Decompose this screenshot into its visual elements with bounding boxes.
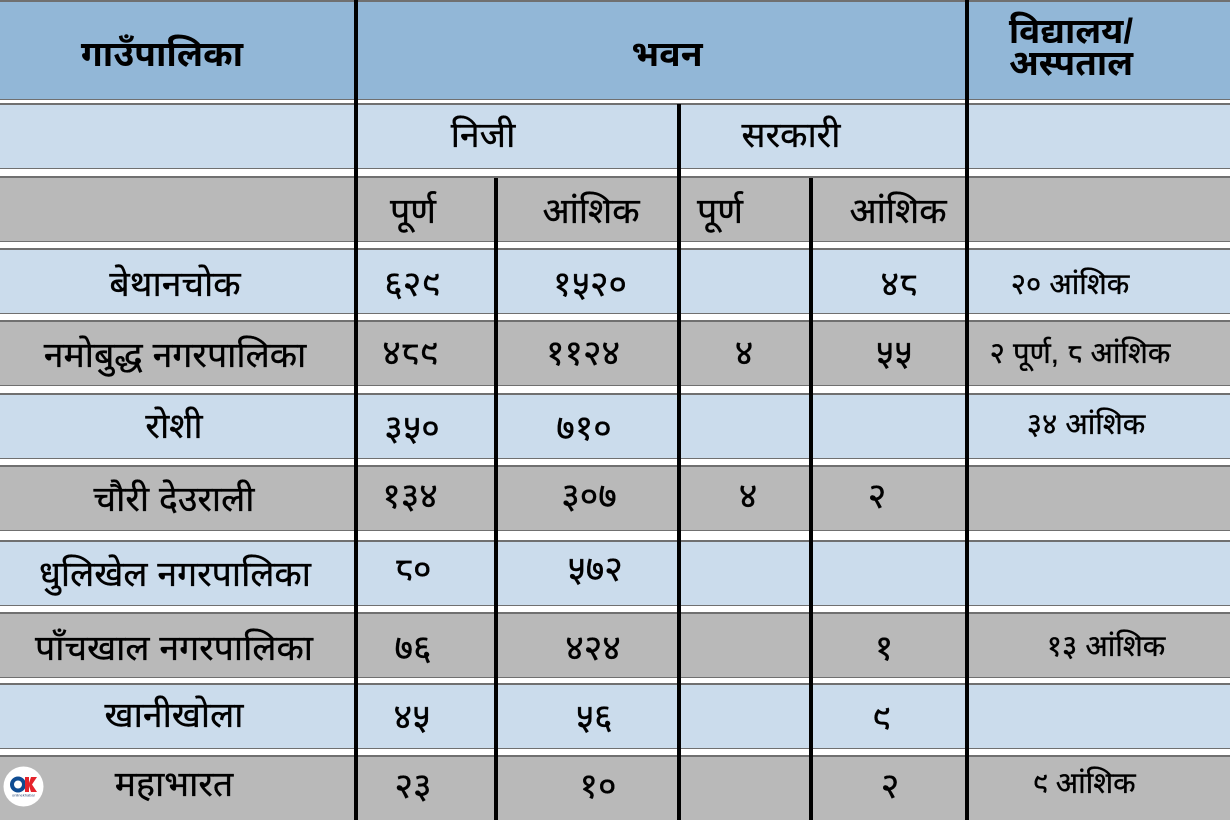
private partial: ५६ xyxy=(575,697,613,737)
school or hospital: १३ आंशिक xyxy=(1047,630,1165,663)
private partial: ३०७ xyxy=(561,476,617,516)
heading: school or hospital: विद्यालय/ xyxy=(1009,12,1133,51)
private partial: ५७२ xyxy=(567,549,623,589)
heading: government partial: आंशिक xyxy=(849,191,947,231)
name: महाभारत xyxy=(115,764,233,804)
heading: municipality: गाउँपालिका xyxy=(81,34,243,74)
private partial: ४२४ xyxy=(565,628,621,668)
heading: building: भवन xyxy=(631,34,703,74)
row: Chauri Deurali xyxy=(0,465,1230,531)
school or hospital: २० आंशिक xyxy=(1011,268,1129,301)
private full: ४८९ xyxy=(382,333,438,373)
private full: ३५० xyxy=(384,408,440,448)
government partial: २ xyxy=(868,476,886,516)
row: Mahabharat xyxy=(0,755,1230,820)
name: नमोबुद्ध नगरपालिका xyxy=(44,335,306,375)
icon: onlinekhabar logo xyxy=(4,766,44,806)
private full: ४५ xyxy=(393,697,431,737)
government full: ४ xyxy=(735,333,753,373)
private partial: ७१० xyxy=(556,408,612,448)
row: Namobuddha xyxy=(0,320,1230,386)
heading: school or hospital: अस्पताल xyxy=(1009,44,1133,83)
government partial: ५५ xyxy=(875,333,913,373)
private full: ७६ xyxy=(394,628,432,668)
government partial: २ xyxy=(881,766,899,806)
school or hospital: ९ आंशिक xyxy=(1032,767,1136,800)
heading: school or hospital xyxy=(1008,12,1134,83)
ownership sub-header row xyxy=(0,103,1230,169)
government full: ४ xyxy=(739,476,757,516)
row: Dhulikhel xyxy=(0,540,1230,606)
name: पाँचखाल नगरपालिका xyxy=(35,628,313,668)
heading: government full: पूर्ण xyxy=(697,191,743,231)
name: बेथानचोक xyxy=(109,264,241,304)
private full: २३ xyxy=(394,766,432,806)
government partial: १ xyxy=(875,628,893,668)
name: धुलिखेल नगरपालिका xyxy=(39,554,311,594)
private full: ६२९ xyxy=(384,264,440,304)
private partial: १५२० xyxy=(553,264,627,304)
heading: government: सरकारी xyxy=(742,115,840,155)
school or hospital: ३४ आंशिक xyxy=(1027,408,1145,441)
name: रोशी xyxy=(145,406,203,446)
row: Khanikhola xyxy=(0,683,1230,749)
row: Panchkhal xyxy=(0,612,1230,678)
icon: onlinekhabar logo: onlinekhabar xyxy=(12,792,36,798)
government partial: ९ xyxy=(872,698,890,738)
row: Bethanchok xyxy=(0,248,1230,314)
heading: private: निजी xyxy=(451,115,515,155)
government partial: ४८ xyxy=(880,264,918,304)
heading: private full: पूर्ण xyxy=(390,191,436,231)
private full: ८० xyxy=(394,549,432,589)
name: चौरी देउराली xyxy=(94,479,254,519)
private full: १३४ xyxy=(382,476,438,516)
heading: private partial: आंशिक xyxy=(542,191,640,231)
damage type sub-header row xyxy=(0,176,1230,242)
school or hospital: २ पूर्ण, ८ आंशिक xyxy=(990,337,1170,370)
private partial: १० xyxy=(579,766,617,806)
header row xyxy=(0,0,1230,100)
row: Roshi xyxy=(0,393,1230,459)
private partial: ११२४ xyxy=(546,333,620,373)
name: खानीखोला xyxy=(105,695,243,735)
